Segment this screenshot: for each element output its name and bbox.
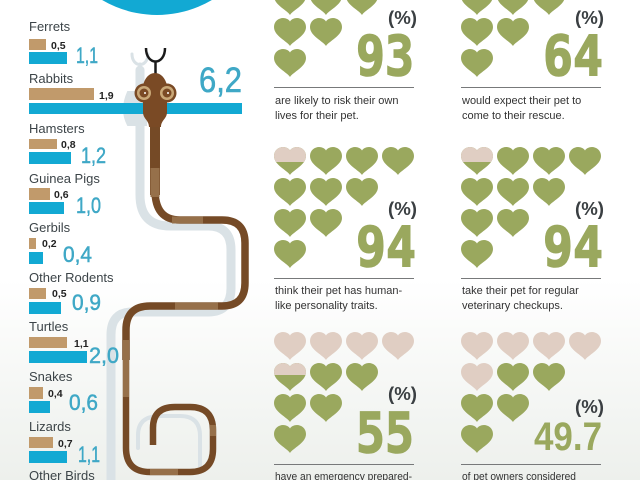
row: Turtles: 1,1 [74,338,89,350]
caption: are likely to risk their own [275,95,398,107]
percent sign: (%) [388,199,417,219]
percent sign: (%) [388,8,417,28]
snake body [126,120,245,472]
row: Gerbils: Gerbils [29,220,71,235]
chart: pet counts by species [29,19,242,480]
percent sign: (%) [575,397,604,417]
row: Other Rodents: 0,9 [72,290,101,315]
row: Lizards: 1,1 [78,442,100,467]
panel: risk lives [274,0,417,122]
panel: emergency prepared [274,332,417,480]
number: 64 [543,24,603,88]
hearts [274,332,414,360]
antenna [146,48,165,76]
right eye [158,84,176,102]
row: Guinea Pigs: 0,6 [54,189,69,201]
number: 94 [543,215,603,279]
left eye [134,84,154,102]
row: Other Rodents: Other Rodents [29,270,114,285]
row: Other Rodents: 0,5 [52,288,67,300]
hearts [461,147,601,268]
row: Ferrets: Ferrets [29,19,71,34]
row: Guinea Pigs: 1,0 [76,193,101,218]
percent sign: (%) [575,199,604,219]
hearts [274,0,378,77]
top blue circle [49,0,265,15]
row: Snakes: 0,4 [48,388,63,400]
caption: think their pet has human- [275,285,403,297]
caption: come to their rescue. [462,110,565,122]
panel: personality traits [274,147,417,312]
number: 49.7 [534,415,602,459]
hearts [461,0,565,77]
row: Gerbils: 0,2 [42,238,57,250]
lighter body segments [126,168,218,472]
panel: expect rescue [461,0,604,122]
row: Snakes [29,369,98,415]
row: Rabbits [29,61,242,114]
row: Ferrets: 0,5 [51,40,66,52]
row: Hamsters: 0,8 [61,139,76,151]
row: Turtles: 2,0 [89,343,119,368]
row: Gerbils [29,220,92,267]
row: Guinea Pigs: Guinea Pigs [29,171,100,186]
row: Snakes: 0,6 [69,390,98,415]
caption: would expect their pet to [461,95,581,107]
number: 93 [356,24,414,88]
percent sign: (%) [388,384,417,404]
caption: like personality traits. [275,300,378,312]
row: Ferrets: 1,1 [76,43,98,68]
row: Hamsters: 1,2 [81,143,106,168]
row: Rabbits: 1,9 [99,90,114,102]
hearts [274,147,414,268]
row: Lizards: 0,7 [58,438,73,450]
row: Ferrets [29,19,98,68]
row: Lizards [29,419,100,467]
caption: take their pet for regular [462,285,579,297]
caption: lives for their pet. [275,110,359,122]
panel: pet owners considered [461,332,604,480]
percent sign: (%) [575,8,604,28]
row: Lizards: Lizards [29,419,71,434]
row: Other Rodents [29,270,114,315]
caption: veterinary checkups. [462,300,563,312]
row: Rabbits: 6,2 [199,61,242,100]
snake shadow [111,54,231,480]
row: Hamsters [29,121,106,168]
row: Guinea Pigs [29,171,101,218]
row: Turtles: Turtles [29,319,69,334]
row: Gerbils: 0,4 [63,242,92,267]
panel: veterinary checkups [461,147,604,312]
snake illustration [126,48,245,472]
row: Hamsters: Hamsters [29,121,85,136]
row: Snakes: Snakes [29,369,73,384]
head [143,73,167,127]
number: 94 [356,215,416,279]
row: Rabbits: Rabbits [29,71,74,86]
number: 55 [356,401,414,465]
hearts [461,332,601,391]
row: Turtles [29,319,119,368]
